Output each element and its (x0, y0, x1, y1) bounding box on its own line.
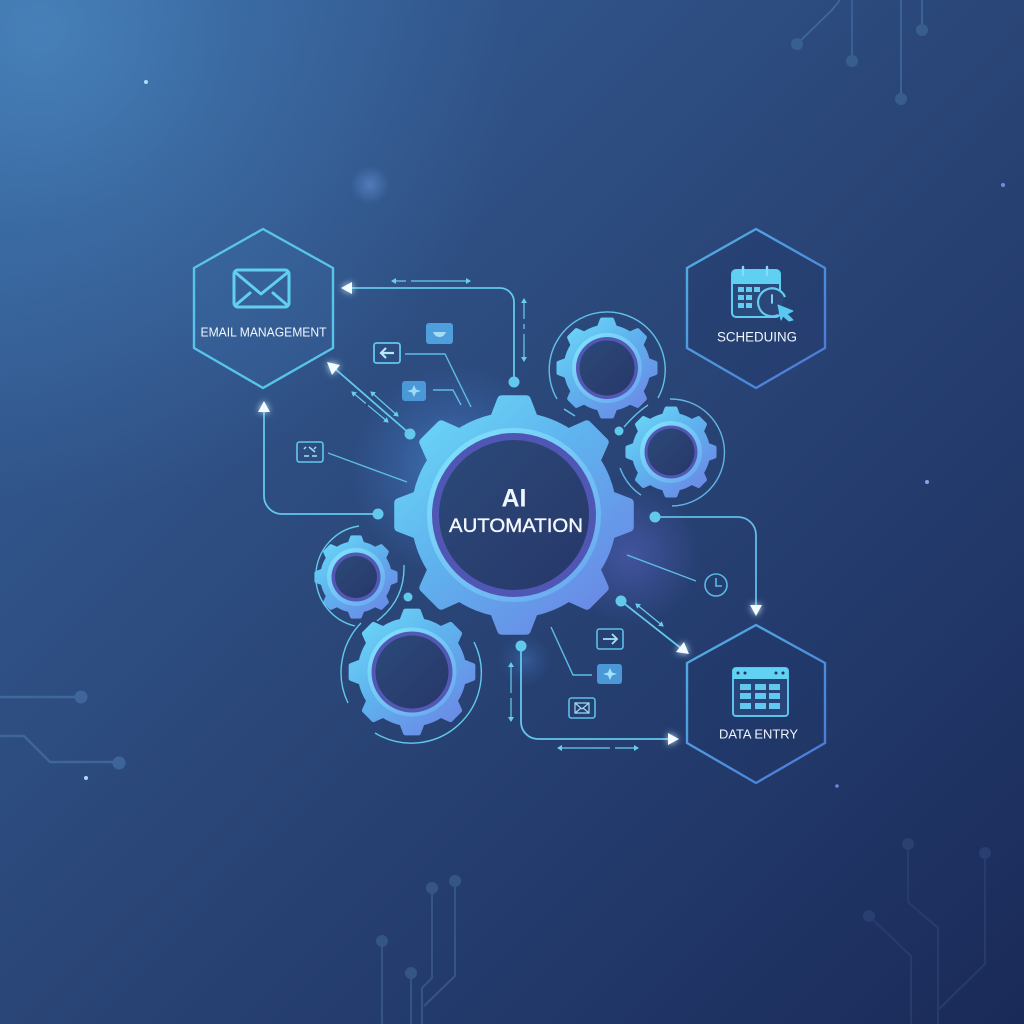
icon: chart chip (297, 442, 323, 462)
leader lines (328, 354, 696, 675)
icon: clock (705, 574, 727, 596)
panel: email management (194, 229, 333, 388)
main gear: AI automation hub (394, 395, 634, 635)
icon: envelope (234, 270, 289, 307)
title: automation: AUTOMATION (449, 516, 583, 537)
circuit traces: top right (791, 0, 928, 105)
title: AI: AI (502, 484, 526, 512)
connector arrow: hub to data entry bottom (516, 640, 679, 745)
label: scheduling: SCHEDUING (717, 330, 797, 344)
background sparkles (84, 80, 1005, 788)
icon: calendar with clock and cursor (732, 267, 793, 321)
panel: data entry (687, 625, 825, 783)
gear: right small (620, 399, 724, 506)
icon: mail chip (569, 698, 595, 718)
icon: data table (733, 668, 788, 716)
panel: scheduling (687, 229, 825, 388)
central glow (350, 365, 700, 686)
gear: lower left large (341, 602, 482, 743)
circuit traces: bottom centre (376, 875, 461, 1024)
circuit traces: left (0, 690, 126, 770)
icon: spark chip bottom (597, 664, 622, 684)
gear: lower left small (310, 526, 412, 626)
icon: filled message chip (426, 323, 453, 344)
label: email management: EMAIL MANAGEMENT (200, 324, 327, 340)
connector arrow: hub to email top (341, 282, 520, 388)
circuit traces: bottom right (863, 838, 991, 1024)
small dashed double arrows (352, 281, 663, 748)
connector arrow: hub to email bottom (258, 401, 384, 520)
icon: back arrow chip (374, 343, 400, 363)
gear: top right large (549, 312, 665, 436)
connector arrow: hub to data entry top (650, 512, 762, 616)
icon: forward arrow chip (597, 629, 623, 649)
icon: spark chip top (402, 381, 426, 401)
label: data entry: DATA ENTRY (719, 726, 798, 742)
connector arrow: hub to email diagonal (327, 362, 416, 440)
connector arrow: hub to data entry diagonal (616, 596, 689, 654)
